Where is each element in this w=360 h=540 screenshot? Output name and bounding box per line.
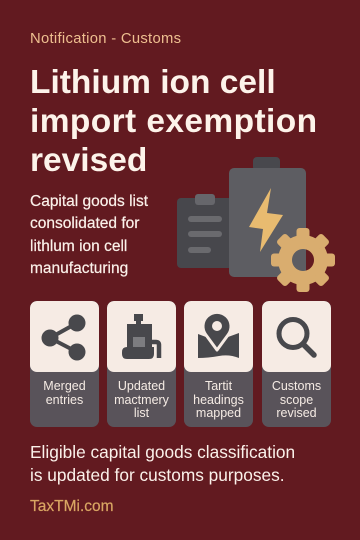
- card: merged entries: [30, 301, 99, 427]
- icon: gear: [271, 228, 335, 292]
- card label: Updated: [118, 379, 165, 393]
- card label: Tartit: [205, 379, 232, 393]
- title: import exemption: [30, 103, 317, 140]
- card label: Customs: [272, 379, 321, 393]
- card label: Merged: [43, 379, 86, 393]
- card label: [43, 379, 86, 406]
- summary text: Eligible capital goods classification: [30, 442, 295, 462]
- title: [30, 64, 317, 179]
- card label: headings: [193, 392, 244, 406]
- summary text: is updated for customs purposes.: [30, 464, 285, 484]
- summary text: [30, 442, 295, 484]
- subtitle: lithlum ion cell: [30, 238, 127, 255]
- card icon panel: [262, 301, 331, 372]
- card label: [193, 379, 244, 420]
- card: updated machinery list: [107, 301, 176, 427]
- subtitle: manufacturing: [30, 260, 128, 277]
- title: revised: [30, 142, 147, 179]
- subtitle: [30, 193, 148, 277]
- card icon panel: [184, 301, 253, 372]
- footer brand: TaxTMi.com: [30, 498, 114, 515]
- subtitle: Capital goods list: [30, 193, 148, 210]
- icon: battery: [229, 157, 306, 277]
- title: Lithium ion cell: [30, 64, 276, 101]
- icon: machine: [122, 314, 162, 359]
- icon: share nodes: [42, 314, 86, 360]
- subtitle: consolidated for: [30, 215, 139, 232]
- icon: map pin: [198, 314, 239, 358]
- icon: magnifier: [276, 317, 317, 358]
- card label: revised: [276, 406, 317, 420]
- card label: scope: [280, 392, 313, 406]
- card label: [114, 379, 169, 420]
- card label: list: [134, 406, 149, 420]
- card icon panel: [30, 301, 99, 372]
- icon: clipboard: [177, 194, 233, 268]
- card icon panel: [107, 301, 176, 372]
- card: tariff headings mapped: [184, 301, 253, 427]
- card: customs scope revised: [262, 301, 331, 427]
- card label: mactmery: [114, 392, 169, 406]
- card label: mapped: [196, 406, 241, 420]
- card label: entries: [46, 392, 83, 406]
- hero icon: battery, clipboard and gear: [177, 157, 335, 292]
- card label: [272, 379, 321, 420]
- category label: Notification - Customs: [30, 31, 181, 47]
